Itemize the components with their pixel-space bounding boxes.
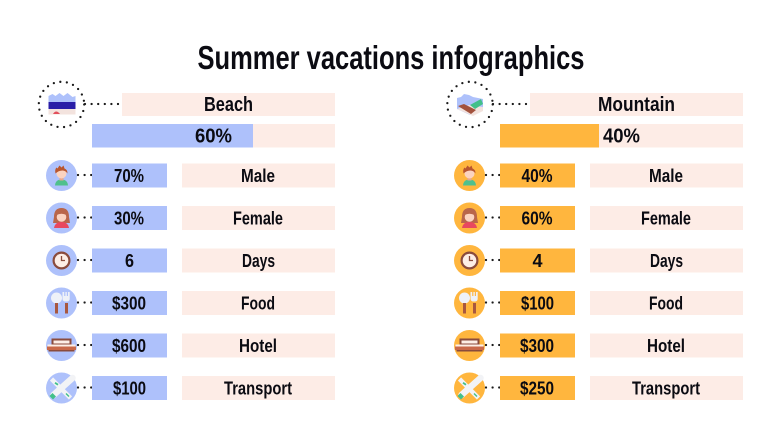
label: Hotel	[182, 334, 335, 358]
value: $300	[500, 334, 575, 358]
value: $300	[92, 291, 167, 315]
value: $600	[92, 334, 167, 358]
label: Female: Female	[233, 208, 283, 228]
icon: woman	[46, 202, 77, 234]
value: $600: $600	[112, 336, 146, 356]
value: $100	[92, 376, 167, 400]
row: hotel	[46, 330, 335, 361]
heading: Beach	[122, 93, 335, 116]
heading: Beach: Beach	[204, 94, 253, 116]
label: Days: Days	[650, 251, 683, 271]
value: 6: 6	[125, 251, 134, 271]
icon: clock	[454, 245, 485, 276]
row: female	[454, 202, 743, 234]
label: Male	[182, 164, 335, 188]
heading: Mountain	[530, 93, 743, 116]
icon: woman	[454, 202, 485, 234]
panel: beach	[39, 82, 335, 404]
value: $250	[500, 376, 575, 400]
row: transport	[46, 372, 335, 404]
label: Female	[590, 206, 743, 230]
value: 70%: 70%	[114, 166, 144, 186]
label: Food: Food	[649, 294, 683, 314]
value: 4: 4	[532, 251, 542, 271]
icon: beach landscape	[39, 82, 84, 127]
label: Food: Food	[241, 294, 275, 314]
row: food	[46, 288, 335, 318]
icon: bed	[454, 330, 485, 361]
value: 60%: 60%	[522, 208, 552, 228]
icon: man	[454, 160, 485, 191]
value: 40%: 40%	[522, 166, 552, 186]
row: days	[454, 245, 743, 276]
value: $300: $300	[520, 336, 554, 356]
value: 4	[500, 248, 575, 272]
label: Transport	[182, 376, 335, 400]
panel: mountain	[447, 82, 743, 404]
bar: 40%	[500, 124, 743, 148]
label: Hotel	[590, 334, 743, 358]
row: male	[46, 160, 335, 191]
bar: 60%: 60%	[195, 126, 232, 148]
icon: man	[46, 160, 77, 191]
icon: mountain landscape	[447, 82, 493, 127]
label: Days	[182, 248, 335, 272]
label: Hotel: Hotel	[647, 336, 685, 356]
value: $100: $100	[113, 378, 146, 398]
connector: mountain icon to heading	[493, 103, 527, 105]
row: transport	[454, 372, 743, 404]
title: Summer vacations infographics	[198, 39, 584, 76]
icon: clock	[46, 245, 77, 276]
icon: cutlery	[454, 288, 485, 318]
value: $100	[500, 291, 575, 315]
label: Days	[590, 248, 743, 272]
value: $250: $250	[520, 378, 554, 398]
label: Transport: Transport	[632, 378, 700, 398]
row: female	[46, 202, 335, 234]
icon: cutlery	[46, 288, 77, 318]
connector: beach icon to heading	[85, 103, 119, 105]
label: Female	[182, 206, 335, 230]
heading: Mountain: Mountain	[598, 94, 675, 116]
label: Transport: Transport	[224, 378, 292, 398]
label: Female: Female	[641, 208, 691, 228]
label: Food	[590, 291, 743, 315]
bar: 40%: 40%	[603, 126, 640, 148]
label: Male	[590, 164, 743, 188]
value: 60%	[500, 206, 575, 230]
bar: 60%	[92, 124, 335, 148]
row: hotel	[454, 330, 743, 361]
row: male	[454, 160, 743, 191]
label: Male: Male	[241, 166, 275, 186]
label: Food	[182, 291, 335, 315]
row: days	[46, 245, 335, 276]
value: 40%	[500, 164, 575, 188]
value: $300: $300	[112, 294, 146, 314]
icon: bed	[46, 330, 77, 361]
icon: plane	[454, 372, 485, 404]
value: 30%: 30%	[114, 208, 144, 228]
label: Days: Days	[242, 251, 275, 271]
value: 30%	[92, 206, 167, 230]
value: $100: $100	[521, 294, 554, 314]
label: Male: Male	[649, 166, 683, 186]
label: Hotel: Hotel	[239, 336, 277, 356]
icon: plane	[46, 372, 77, 404]
row: food	[454, 288, 743, 318]
value: 70%	[92, 164, 167, 188]
label: Transport	[590, 376, 743, 400]
value: 6	[92, 248, 167, 272]
